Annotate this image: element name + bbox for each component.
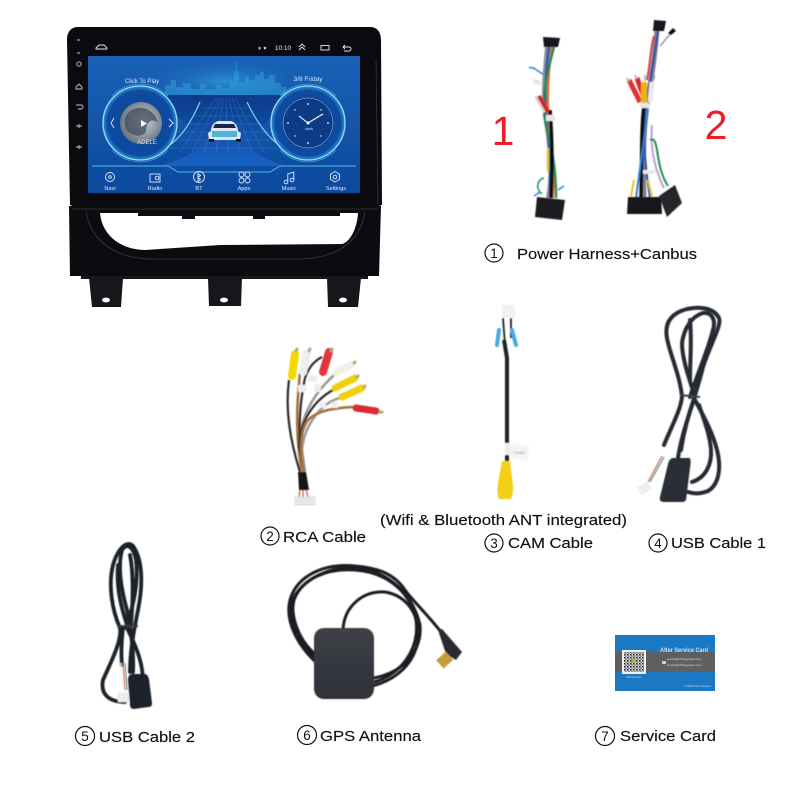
car illustration [208, 121, 241, 142]
camera cable: YX003 [513, 450, 526, 455]
service card [615, 635, 715, 691]
red number 1: 1 [492, 108, 514, 154]
screen: clock [305, 127, 313, 131]
label: service card [596, 726, 716, 746]
app row: Radio [148, 186, 162, 192]
label: GPS antenna: 6 [303, 728, 311, 743]
status bar: ∗ ♥ [257, 46, 267, 52]
camera cable [497, 305, 530, 499]
service card: service@zhiangyuauto.com [667, 663, 702, 667]
label: power harness: 1 [490, 246, 498, 261]
label: CAM cable: CAM Cable [508, 535, 593, 552]
label: power harness [485, 244, 697, 263]
status bar [96, 44, 351, 52]
app row: Settings [326, 186, 346, 192]
harness 1 [529, 37, 565, 220]
label: USB cable 2 [76, 726, 195, 746]
label: GPS antenna: GPS Antenna [320, 728, 422, 745]
mounting brackets [81, 276, 368, 307]
label: service card: 7 [601, 729, 609, 744]
road centre [160, 95, 287, 166]
label: RCA cable: RCA Cable [283, 529, 366, 546]
red number 2: 2 [705, 102, 727, 148]
service card: YUGAR Tech Service [684, 684, 711, 688]
app row: BT [195, 186, 203, 192]
app row [104, 172, 346, 192]
stereo front frame [67, 27, 382, 208]
USB cable 2 [102, 544, 152, 709]
label: RCA cable: 2 [266, 529, 274, 544]
USB cable 1 [638, 308, 719, 502]
left gauge with album art [103, 86, 177, 160]
service card: service@zhiangyuauto.com [667, 657, 702, 661]
service card: After Service Card [660, 647, 708, 654]
label: USB cable 1: USB Cable 1 [671, 535, 766, 552]
screen captions: Click To Play [125, 79, 159, 85]
screen: ADELE [137, 140, 157, 146]
label: GPS antenna [298, 726, 422, 745]
skyline [165, 61, 286, 95]
label: power harness: Power Harness+Canbus [517, 246, 697, 263]
label: USB cable 2: USB Cable 2 [99, 729, 195, 746]
app row: Navi [104, 186, 116, 192]
app row: Apps [238, 186, 251, 192]
side buttons [76, 40, 83, 149]
head unit: car stereo with dash panel [67, 27, 382, 307]
screen [88, 56, 360, 193]
screen: 3/8 Friday [294, 76, 323, 83]
GPS antenna [289, 566, 462, 699]
label: USB cable 1: 4 [654, 536, 662, 551]
label: RCA cable [261, 527, 366, 546]
QR code [622, 650, 646, 674]
right clock gauge [271, 86, 345, 160]
label: CAM cable: 3 [490, 536, 498, 551]
RCA cable [288, 349, 382, 505]
label: wifi note: (Wifi & Bluetooth ANT integrated) [380, 512, 627, 529]
service card: WeChat Scan [626, 676, 642, 679]
lower dash panel with cut-out [69, 206, 381, 276]
status bar: 10:10 [275, 45, 292, 52]
harness 2 with canbus box [627, 20, 682, 217]
label: CAM cable [485, 534, 593, 552]
label: service card: Service Card [620, 728, 716, 745]
label: USB cable 2: 5 [81, 729, 89, 744]
app row: Music [282, 186, 297, 192]
